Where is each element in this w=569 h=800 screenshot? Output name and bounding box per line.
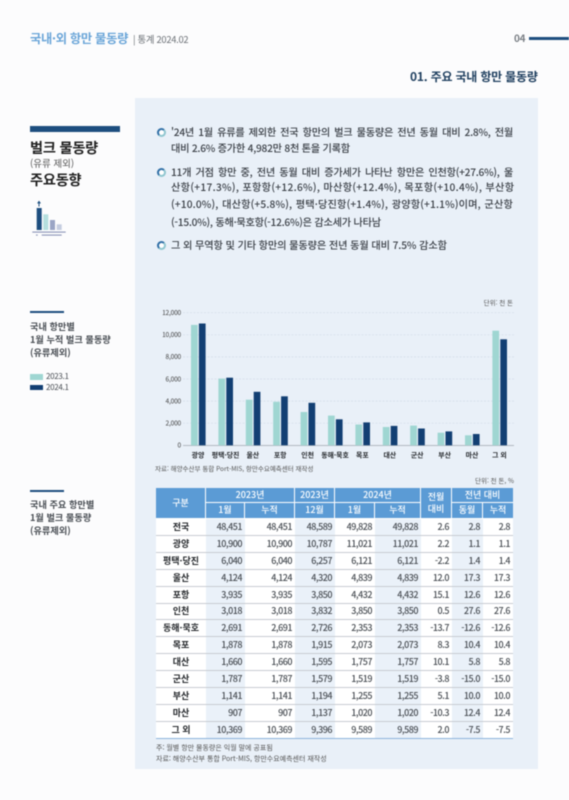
data table: 1,020 (351, 706, 372, 719)
data table: 전년 대비 (465, 488, 500, 501)
data table: 6,257 (311, 554, 332, 567)
table note: 주: 월별 항만 물동량은 익월 말에 공표됨 (156, 743, 273, 753)
sidebar: table label (29, 489, 94, 537)
data table: 10,900 (267, 537, 292, 550)
x axis labels: 목포 (356, 450, 369, 460)
x axis labels: 군산 (411, 450, 424, 460)
data table: 907 (228, 706, 242, 719)
data table: 4,124 (221, 571, 242, 584)
bullet icon 2 (157, 168, 166, 177)
data table: 4,320 (311, 571, 332, 584)
x axis labels: 인천 (301, 450, 314, 460)
x axis labels: 울산 (246, 450, 260, 460)
data table: 1,194 (311, 689, 332, 702)
data table: 0.5 (438, 604, 449, 617)
data table: 1,255 (351, 689, 372, 702)
data table: 1,878 (271, 638, 292, 651)
data table: 2.2 (438, 537, 449, 550)
data table: 2,353 (351, 621, 372, 634)
data table: 1.4 (469, 554, 480, 567)
data table: 2,073 (351, 638, 372, 651)
data table: 1,595 (311, 655, 332, 668)
data table: 1.1 (469, 537, 480, 550)
data table: 6,040 (221, 554, 242, 567)
label text line 3: (유류제외) (30, 523, 71, 537)
x axis labels (192, 450, 507, 460)
data table: 동월 (459, 503, 475, 516)
heading bar (30, 126, 120, 132)
data table: 6,040 (271, 554, 292, 567)
data table: 3,935 (221, 588, 242, 601)
label text line 2: 1월 누적 벌크 물동량 (30, 332, 111, 346)
data table: 9,589 (351, 723, 372, 736)
data table: 1,020 (397, 706, 418, 719)
data table: 1,915 (311, 638, 332, 651)
data table: 누적 (389, 503, 406, 516)
data table: -3.8 (435, 672, 449, 685)
data table: 광양 (173, 537, 189, 550)
heading line 1: 벌크 물동량 (30, 138, 98, 158)
table unit: 단위: 천 톤, % (475, 475, 514, 485)
header title: 국내·외 항만 물동량 (30, 29, 128, 47)
chart source: 자료: 해양수산부 통합 Port-MIS, 항만수요예측센터 재작성 (155, 463, 314, 473)
data table: 전국 (173, 520, 189, 533)
data table: 2,691 (221, 621, 242, 634)
data table: 대산 (173, 655, 189, 668)
data table: 전월 (428, 490, 444, 503)
table source: 자료: 해양수산부 통합 Port-MIS, 항만수요예측센터 재작성 (156, 754, 327, 764)
data table: 907 (278, 706, 292, 719)
data table: 48,451 (267, 520, 292, 533)
data table: 1,878 (221, 638, 242, 651)
data table: 3,850 (351, 604, 372, 617)
sidebar: bulk heading (29, 125, 121, 236)
data table: 5.1 (438, 689, 449, 702)
bullet 3 line 1: 그 외 무역항 및 기타 항만의 물동량은 전년 동월 대비 7.5% 감소함 (171, 237, 447, 252)
data table: 4,124 (271, 571, 292, 584)
y axis labels (162, 307, 182, 450)
x axis labels: 대산 (383, 450, 397, 460)
data table: 1,579 (311, 672, 332, 685)
data table: 2.0 (438, 723, 449, 736)
data table: 15.1 (433, 588, 449, 601)
data table: 누적 (261, 503, 278, 516)
bar chart (162, 307, 514, 460)
data table: 1,141 (221, 689, 242, 702)
data table: 12.4 (494, 706, 510, 719)
data table: 17.3 (464, 571, 480, 584)
label text line 1: 국내 항만별 (30, 319, 75, 333)
data table: 2024년 (363, 488, 392, 501)
data table: 1,255 (397, 689, 418, 702)
data table: 포항 (173, 588, 189, 601)
data table: 3,935 (271, 588, 292, 601)
data table: 1,787 (221, 672, 242, 685)
legend label 2023.1: 2023.1 (46, 371, 69, 382)
data table: 6,121 (351, 554, 372, 567)
data table: -7.5 (496, 723, 510, 736)
x axis labels: 부산 (438, 450, 452, 460)
data table: -12.6 (491, 621, 510, 634)
icon: bar chart (32, 200, 66, 236)
data table: 10.0 (494, 689, 510, 702)
bullet 2 line 3: (+10.0%), 대산항(+5.8%), 평택·당진항(+1.4%), 광양항(+1.1%)이며, 군산항 (171, 196, 513, 211)
data table: 2.6 (438, 520, 449, 533)
data table: 2023년 (300, 488, 329, 501)
data table: 군산 (173, 672, 189, 685)
data table: 4,432 (397, 588, 418, 601)
data table: 1,519 (351, 672, 372, 685)
x axis labels: 포항 (274, 450, 287, 460)
data table: 5.8 (499, 655, 510, 668)
data table: 48,451 (217, 520, 242, 533)
data table: 3,018 (221, 604, 242, 617)
legend swatch 2024.1 (30, 385, 43, 390)
page number bar (529, 36, 569, 40)
x axis labels: 광양 (192, 450, 205, 460)
x axis labels: 마산 (466, 450, 479, 460)
x axis labels: 그 외 (492, 450, 507, 460)
data table: 1,660 (271, 655, 292, 668)
bullet 2 line 2: 산항(+17.3%), 포항항(+12.6%), 마산항(+12.4%), 목포항(+10.4%), 부산항 (171, 179, 514, 194)
y axis labels: 2,000 (166, 418, 182, 428)
divider line (30, 490, 64, 492)
main panel background (135, 98, 538, 769)
data table: 12월 (305, 503, 324, 516)
data table: 인천 (173, 604, 189, 617)
data table: 2,073 (397, 638, 418, 651)
data table: 1,141 (271, 689, 292, 702)
data table: 4,839 (397, 571, 418, 584)
data table: 10,900 (217, 537, 242, 550)
label text line 2: 1월 벌크 물동량 (30, 510, 91, 524)
data table: 부산 (173, 689, 189, 702)
data table: -12.6 (461, 621, 480, 634)
data table: 4,432 (351, 588, 372, 601)
data table: 1,757 (351, 655, 372, 668)
sidebar: chart label (29, 310, 112, 393)
data table: -15.0 (491, 672, 510, 685)
label text line 3: (유류제외) (30, 345, 71, 359)
data table: 2,691 (271, 621, 292, 634)
data table: 9,396 (311, 723, 332, 736)
data table: 1,660 (221, 655, 242, 668)
data table: 2.8 (499, 520, 510, 533)
data table: 2023년 (236, 488, 264, 501)
data table: 평택·당진 (163, 554, 199, 567)
heading note: (유류 제외) (30, 156, 74, 170)
y axis labels: 4,000 (166, 395, 182, 405)
y axis labels: 8,000 (166, 351, 182, 361)
data table: -10.3 (430, 706, 449, 719)
bullet 1 line 1: '24년 1월 유류를 제외한 전국 항만의 벌크 물동량은 전년 동월 대비 2.8%, 전월 (171, 124, 513, 139)
heading line 2: 주요동향 (30, 170, 81, 190)
data table: 1,757 (397, 655, 418, 668)
x axis labels: 동해·묵호 (321, 450, 349, 460)
data table: 2,353 (397, 621, 418, 634)
divider line (30, 311, 64, 313)
data table: 대비 (428, 502, 444, 515)
data table: 12.6 (494, 588, 510, 601)
data table: 27.6 (494, 604, 510, 617)
data table: -15.0 (461, 672, 480, 685)
data table: 2.8 (469, 520, 480, 533)
y axis labels: 12,000 (162, 307, 182, 317)
bullet 2 line 1: 11개 거점 항만 중, 전년 동월 대비 증가세가 나타난 항만은 인천항(+27.6%), 울 (171, 164, 513, 179)
data table: 1월 (218, 503, 232, 516)
data table: 48,589 (307, 520, 332, 533)
data table: 마산 (173, 706, 189, 719)
data table: 3,850 (397, 604, 418, 617)
data table: 1,519 (397, 672, 418, 685)
data table: 10,787 (307, 537, 332, 550)
section title: 01. 주요 국내 항만 물동량 (410, 68, 538, 85)
data table: 10.0 (464, 689, 480, 702)
data table: 5.8 (469, 655, 480, 668)
data table: 1.1 (499, 537, 510, 550)
data table: 1,787 (271, 672, 292, 685)
bullet icon 3 (157, 241, 166, 250)
data table: 울산 (173, 571, 189, 584)
y axis labels: 6,000 (166, 373, 182, 383)
data table: 49,828 (393, 520, 418, 533)
data table: 2,726 (311, 621, 332, 634)
data table: 17.3 (494, 571, 510, 584)
data table: 12.0 (433, 571, 449, 584)
bars 2023.1 (191, 325, 499, 445)
data table: 구분 (172, 496, 189, 509)
x axis labels: 평택·당진 (212, 450, 239, 460)
data table: 11,021 (393, 537, 418, 550)
legend label 2024.1: 2024.1 (46, 382, 69, 393)
data table: 11,021 (347, 537, 372, 550)
chart unit: 단위: 천 톤 (484, 297, 513, 307)
data table: 그 외 (171, 723, 191, 736)
data table: 1월 (348, 503, 361, 516)
bullet 1 line 2: 대비 2.6% 증가한 4,982만 8천 톤을 기록함 (171, 140, 350, 155)
data table: -2.2 (435, 554, 449, 567)
page number: 04 (514, 30, 525, 45)
y axis labels: 0 (178, 440, 182, 450)
data table: 9,589 (397, 723, 418, 736)
data table: 누적 (490, 503, 506, 516)
data table: 10.4 (464, 638, 480, 651)
data table (155, 487, 514, 740)
data table: 10.1 (433, 655, 449, 668)
data table: -7.5 (466, 723, 480, 736)
header issue label: | 통계 2024.02 (133, 32, 188, 46)
label text line 1: 국내 주요 항만별 (30, 497, 94, 511)
data table: 동해·묵호 (163, 621, 199, 634)
data table: 3,018 (271, 604, 292, 617)
data table: 3,850 (311, 588, 332, 601)
data table: -13.7 (430, 621, 449, 634)
data table: 12.4 (464, 706, 480, 719)
data table: 10.4 (494, 638, 510, 651)
bullet 2 line 4: (-15.0%), 동해·묵호항(-12.6%)은 감소세가 나타남 (171, 214, 381, 229)
data table: 1.4 (499, 554, 510, 567)
data table: 4,839 (351, 571, 372, 584)
bullet icon 1 (157, 128, 166, 137)
data table: 27.6 (464, 604, 480, 617)
data table: 12.6 (464, 588, 480, 601)
data table: 8.3 (438, 638, 449, 651)
data table: 10,369 (267, 723, 292, 736)
bars 2024.1 (199, 324, 507, 445)
data table: 3,832 (311, 604, 332, 617)
data table: 49,828 (347, 520, 372, 533)
data table: 10,369 (217, 723, 242, 736)
data table: 6,121 (397, 554, 418, 567)
y axis labels: 10,000 (162, 329, 182, 339)
legend swatch 2023.1 (30, 374, 43, 380)
data table: 목포 (173, 638, 189, 651)
data table: 1,137 (311, 706, 332, 719)
